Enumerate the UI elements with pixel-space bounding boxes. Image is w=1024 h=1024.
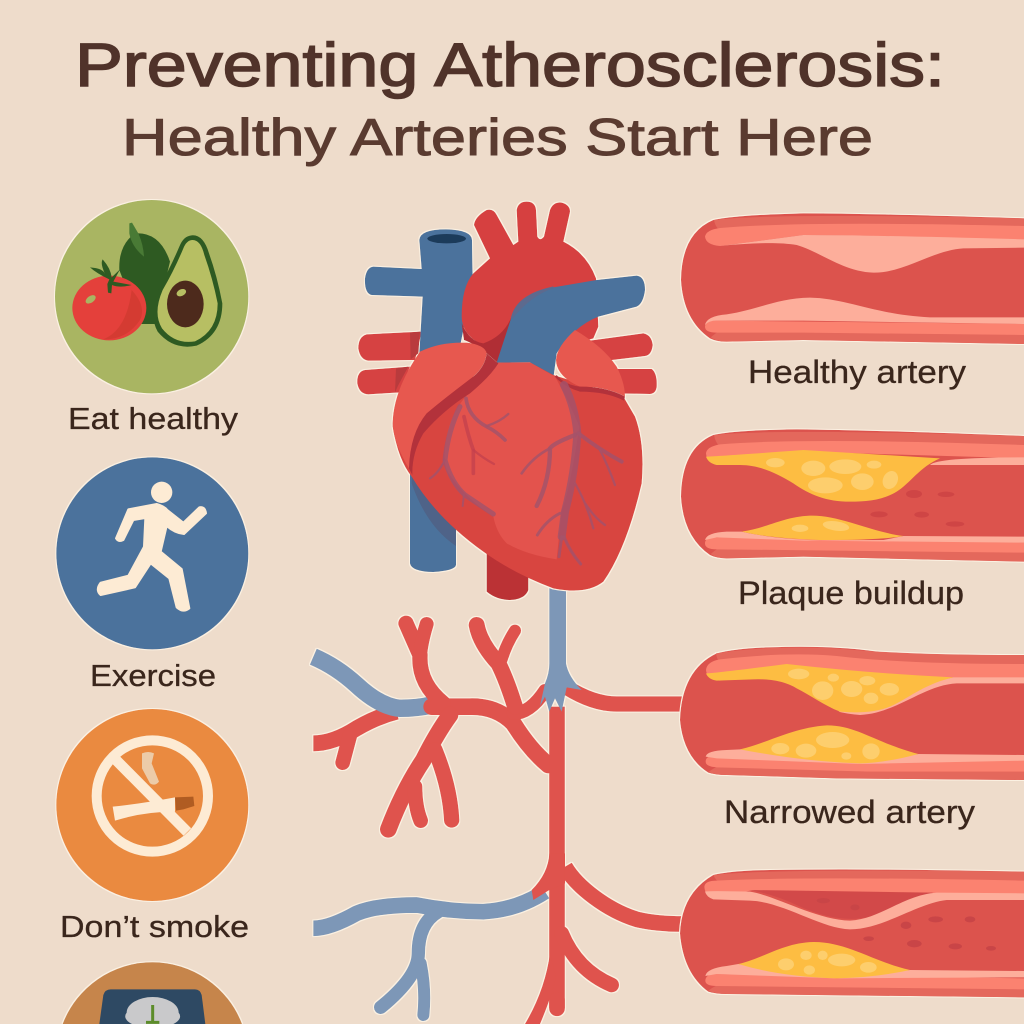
- icon: running person: [56, 457, 248, 649]
- central ventricle: [445, 362, 579, 559]
- atrium shadow band: [409, 353, 498, 475]
- artery: narrowed: [680, 647, 1024, 780]
- heart body: [393, 352, 642, 591]
- superior vena cava: [365, 229, 473, 353]
- artery flare: [532, 853, 565, 900]
- vein trunk from heart: [540, 587, 582, 712]
- icon: no smoking: [56, 709, 248, 901]
- label: healthy artery: Healthy artery: [748, 354, 966, 390]
- pulmonary veins: [357, 332, 657, 394]
- title: Healthy Arteries Start Here: [122, 109, 873, 167]
- label: don't smoke: Don’t smoke: [60, 909, 249, 944]
- pulmonary artery: [497, 276, 645, 378]
- left red branch under vein: [313, 712, 397, 763]
- inferior vena cava: [410, 467, 456, 572]
- icon: weight scale: [63, 962, 242, 1024]
- left atrium: [556, 330, 625, 397]
- artery: clot and damage: [680, 869, 1024, 997]
- label: plaque buildup: Plaque buildup: [738, 575, 964, 611]
- red arteries: [388, 623, 683, 1008]
- artery: plaque buildup: [681, 429, 1024, 562]
- title: [75, 31, 945, 167]
- blue veins: [313, 657, 545, 1015]
- heart illustration: [357, 202, 657, 600]
- title: Preventing Atherosclerosis:: [75, 31, 945, 99]
- diagram: arteries and veins network: [313, 587, 683, 1024]
- descending aorta: [487, 550, 528, 600]
- lower left artery leg: [525, 953, 556, 1024]
- panel: artery stages: [680, 213, 1024, 997]
- vein shadow: [395, 332, 420, 392]
- panel: prevention habits: [55, 200, 249, 1024]
- label: eat healthy: Eat healthy: [68, 401, 239, 436]
- icon: healthy food: [55, 200, 248, 393]
- label: exercise: Exercise: [90, 658, 216, 693]
- artery: healthy: [681, 213, 1024, 344]
- label: narrowed artery: Narrowed artery: [724, 794, 975, 830]
- coronary vessels: [430, 385, 622, 564]
- hub spikes: [423, 699, 433, 713]
- aorta: [462, 202, 598, 363]
- right atrium: [393, 343, 487, 470]
